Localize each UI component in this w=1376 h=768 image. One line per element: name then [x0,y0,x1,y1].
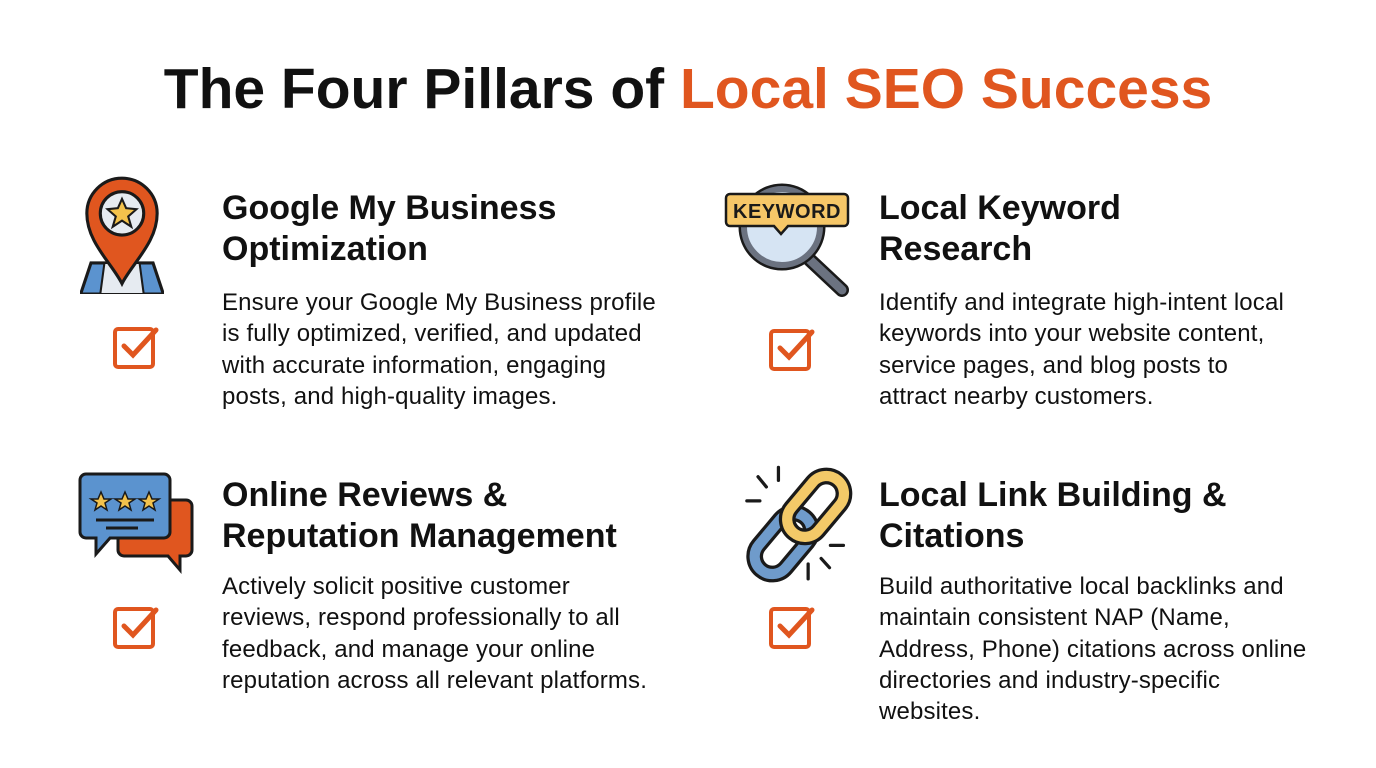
heading: Research [879,230,1032,268]
text [879,289,1284,410]
heading: Reputation Management [222,516,617,554]
text: service pages, and blog posts to [879,352,1228,379]
icon: checkbox [769,607,814,649]
heading [222,476,617,554]
icon: chain link [745,466,852,582]
text: feedback, and manage your online [222,636,595,663]
icon: keyword magnifier: KEYWORD [733,201,841,223]
panel: reviews [78,472,647,694]
text [222,573,647,694]
text: maintain consistent NAP (Name, [879,604,1230,631]
title: The Four Pillars of Local SEO Success [164,57,1212,121]
panel: link building [745,466,1306,725]
text: is fully optimized, verified, and updated [222,320,642,347]
heading: Local Keyword [879,189,1121,227]
text: Actively solicit positive customer [222,573,570,600]
text: posts, and high-quality images. [222,383,558,410]
heading: Online Reviews & [222,476,507,514]
text: reviews, respond professionally to all [222,604,620,631]
text: directories and industry-specific [879,667,1220,694]
panel: keyword research [724,184,1284,410]
text [222,289,656,410]
text: Identify and integrate high-intent local [879,289,1284,316]
icon: checkbox [113,607,158,649]
heading [879,189,1121,268]
panel: google my business [80,176,656,410]
text: with accurate information, engaging [222,352,606,379]
text: reputation across all relevant platforms. [222,667,647,694]
text: Address, Phone) citations across online [879,636,1306,663]
text: Build authoritative local backlinks and [879,573,1284,600]
heading [222,189,556,268]
heading: Google My Business [222,189,556,227]
text: attract nearby customers. [879,383,1154,410]
text: Ensure your Google My Business profile [222,289,656,316]
text: websites. [879,698,980,725]
icon: checkbox [113,327,158,369]
text [879,573,1306,725]
icon: checkbox [769,329,814,371]
text: keywords into your website content, [879,320,1264,347]
icon: map pin [80,176,164,294]
heading: Optimization [222,230,428,268]
heading: Citations [879,516,1024,554]
icon: keyword magnifier [724,184,850,297]
heading: Local Link Building & [879,476,1227,514]
icon: review bubbles [78,472,194,574]
heading [879,476,1227,554]
